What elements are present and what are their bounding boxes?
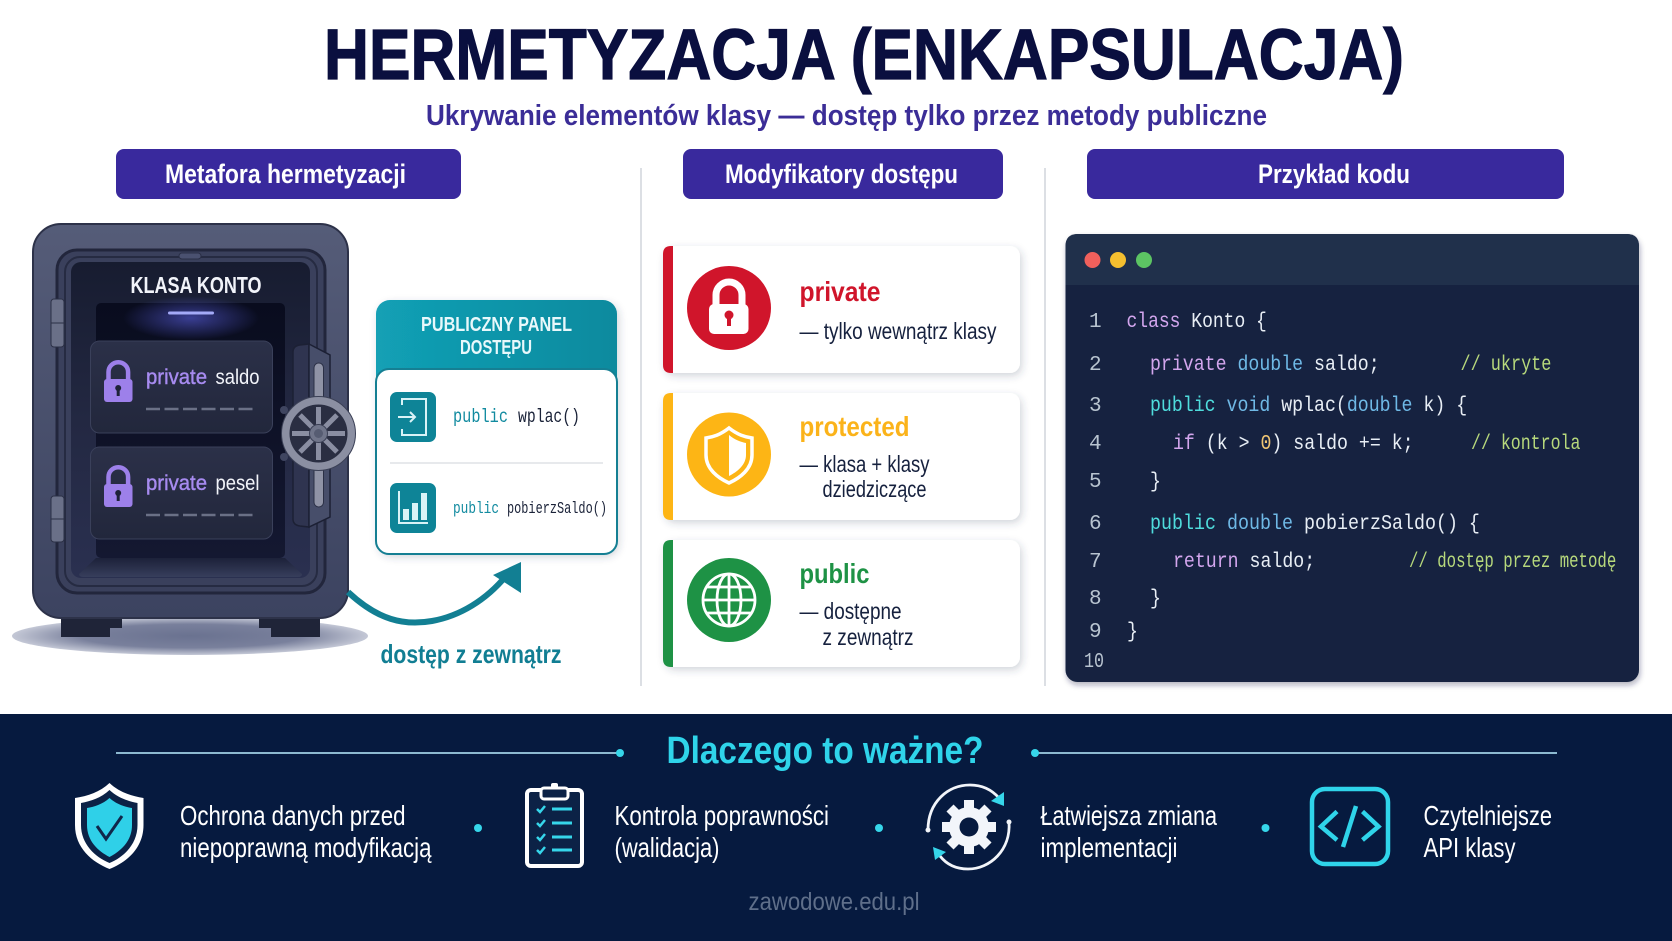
title bar bbox=[1066, 234, 1639, 285]
item: readable API bbox=[1312, 789, 1552, 864]
arrow label: dostęp z zewnątrz bbox=[380, 639, 562, 669]
code lines: return saldo; bbox=[1173, 550, 1315, 573]
line numbers bbox=[1084, 311, 1104, 674]
public text: public bbox=[800, 558, 870, 589]
panel heading: DOSTĘPU bbox=[460, 337, 532, 359]
heading: metafora: Metafora hermetyzacji bbox=[165, 159, 406, 189]
protected text bbox=[800, 411, 930, 502]
line numbers: 10 bbox=[1084, 651, 1104, 674]
method: wplac: public bbox=[453, 406, 508, 428]
panel: public access bbox=[376, 300, 617, 554]
heading: przykład kodu: Przykład kodu bbox=[1258, 159, 1410, 189]
icon: globe bbox=[687, 558, 771, 642]
text: implementation change bbox=[1040, 800, 1217, 863]
code lines: class Konto { bbox=[1126, 310, 1267, 333]
public text bbox=[800, 558, 914, 650]
title: HERMETYZACJA (ENKAPSULACJA) bbox=[324, 16, 1404, 95]
method: pobierzSaldo bbox=[390, 483, 607, 533]
code lines: // ukryte bbox=[1460, 352, 1551, 377]
code lines: } bbox=[1150, 470, 1161, 493]
method: wplac: wplac() bbox=[518, 406, 580, 428]
private text: — tylko wewnątrz klasy bbox=[800, 318, 997, 344]
heading rules bbox=[116, 749, 1557, 757]
private text bbox=[800, 276, 997, 344]
panel heading bbox=[421, 314, 572, 359]
private field: saldo: private bbox=[146, 366, 207, 389]
heading: modyfikatory: Modyfikatory dostępu bbox=[725, 159, 958, 189]
icon: gear cycle bbox=[926, 785, 1012, 869]
icon: code brackets bbox=[1312, 789, 1388, 864]
code lines: } bbox=[1150, 587, 1161, 610]
method: pobierzSaldo: public bbox=[453, 500, 499, 519]
text: validation bbox=[614, 800, 829, 863]
method: wplac bbox=[390, 392, 580, 442]
item dot bbox=[1262, 824, 1270, 832]
card: public bbox=[663, 540, 1020, 667]
code lines: public void wplac(double k) { bbox=[1150, 394, 1467, 417]
icon: clipboard bbox=[527, 783, 582, 866]
panel heading: PUBLICZNY PANEL bbox=[421, 314, 572, 336]
safe body bbox=[33, 224, 348, 618]
line numbers: 8 bbox=[1089, 588, 1102, 611]
line numbers: 2 bbox=[1089, 354, 1102, 377]
text: data protection: Ochrona danych przed bbox=[180, 800, 406, 831]
safe hinges bbox=[51, 299, 64, 542]
dial wheel bbox=[282, 396, 356, 470]
card: private bbox=[663, 246, 1020, 373]
code lines: } bbox=[1127, 620, 1138, 643]
text: readable API: API klasy bbox=[1424, 832, 1516, 863]
private field: saldo: saldo bbox=[216, 366, 260, 389]
icon: shield bbox=[687, 412, 771, 496]
private field: pesel: pesel bbox=[216, 472, 260, 495]
subtitle: Ukrywanie elementów klasy — dostęp tylko przez metody publiczne bbox=[426, 100, 1267, 132]
panel: why it matters bbox=[0, 714, 1672, 941]
private text: private bbox=[800, 276, 880, 307]
code lines: // dostęp przez metodę bbox=[1409, 550, 1616, 574]
line numbers: 4 bbox=[1089, 433, 1102, 456]
protected text: — klasa + klasy bbox=[800, 451, 930, 477]
item dot bbox=[875, 824, 883, 832]
item: validation bbox=[527, 783, 829, 866]
panel: safe metaphor bbox=[12, 224, 368, 655]
interior light bbox=[123, 296, 259, 340]
text: validation: (walidacja) bbox=[614, 832, 720, 863]
public text: z zewnątrz bbox=[822, 624, 914, 650]
heading: metafora bbox=[116, 149, 461, 199]
access arrow bbox=[348, 562, 521, 623]
line numbers: 1 bbox=[1089, 311, 1102, 334]
text: readable API bbox=[1424, 800, 1552, 863]
text: data protection bbox=[180, 800, 432, 863]
icon: shield check bbox=[75, 783, 144, 869]
public text: — dostępne bbox=[800, 598, 902, 624]
heading: przykład kodu bbox=[1087, 149, 1564, 199]
line numbers: 3 bbox=[1089, 395, 1102, 418]
line numbers: 6 bbox=[1089, 513, 1102, 536]
item: implementation change bbox=[926, 785, 1217, 869]
code lines: public double pobierzSaldo() { bbox=[1150, 512, 1480, 535]
text: implementation change: Łatwiejsza zmiana bbox=[1040, 800, 1217, 831]
panel: code window bbox=[1066, 234, 1639, 682]
handle plate bbox=[280, 344, 330, 527]
private field: pesel bbox=[90, 447, 272, 539]
item dot bbox=[474, 824, 482, 832]
heading: modyfikatory bbox=[683, 149, 1003, 199]
code lines: if (k > 0) saldo += k; bbox=[1173, 432, 1414, 455]
text: validation: Kontrola poprawności bbox=[614, 800, 829, 831]
safe feet bbox=[61, 612, 320, 637]
code lines: // kontrola bbox=[1471, 431, 1580, 456]
code lines bbox=[1126, 310, 1616, 643]
private field: pesel: private bbox=[146, 472, 207, 495]
card: protected bbox=[663, 393, 1020, 520]
method: pobierzSaldo: pobierzSaldo() bbox=[507, 500, 607, 519]
text: readable API: Czytelniejsze bbox=[1424, 800, 1552, 831]
safe interior bbox=[71, 253, 310, 578]
footer source: zawodowe.edu.pl bbox=[748, 888, 920, 916]
protected text: dziedziczące bbox=[822, 476, 926, 502]
item: data protection bbox=[75, 783, 432, 869]
text: implementation change: implementacji bbox=[1040, 832, 1178, 863]
protected text: protected bbox=[800, 411, 910, 442]
text: data protection: niepoprawną modyfikacją bbox=[180, 832, 432, 863]
column dividers bbox=[641, 168, 1045, 686]
section heading: Dlaczego to ważne? bbox=[666, 730, 984, 772]
private field: saldo bbox=[90, 341, 272, 433]
icon: padlock bbox=[687, 266, 771, 350]
code lines: private double saldo; bbox=[1150, 353, 1380, 376]
safe label: KLASA KONTO bbox=[130, 272, 262, 298]
line numbers: 9 bbox=[1089, 621, 1102, 644]
safe shadow bbox=[12, 617, 368, 655]
line numbers: 5 bbox=[1089, 471, 1102, 494]
line numbers: 7 bbox=[1089, 551, 1102, 574]
